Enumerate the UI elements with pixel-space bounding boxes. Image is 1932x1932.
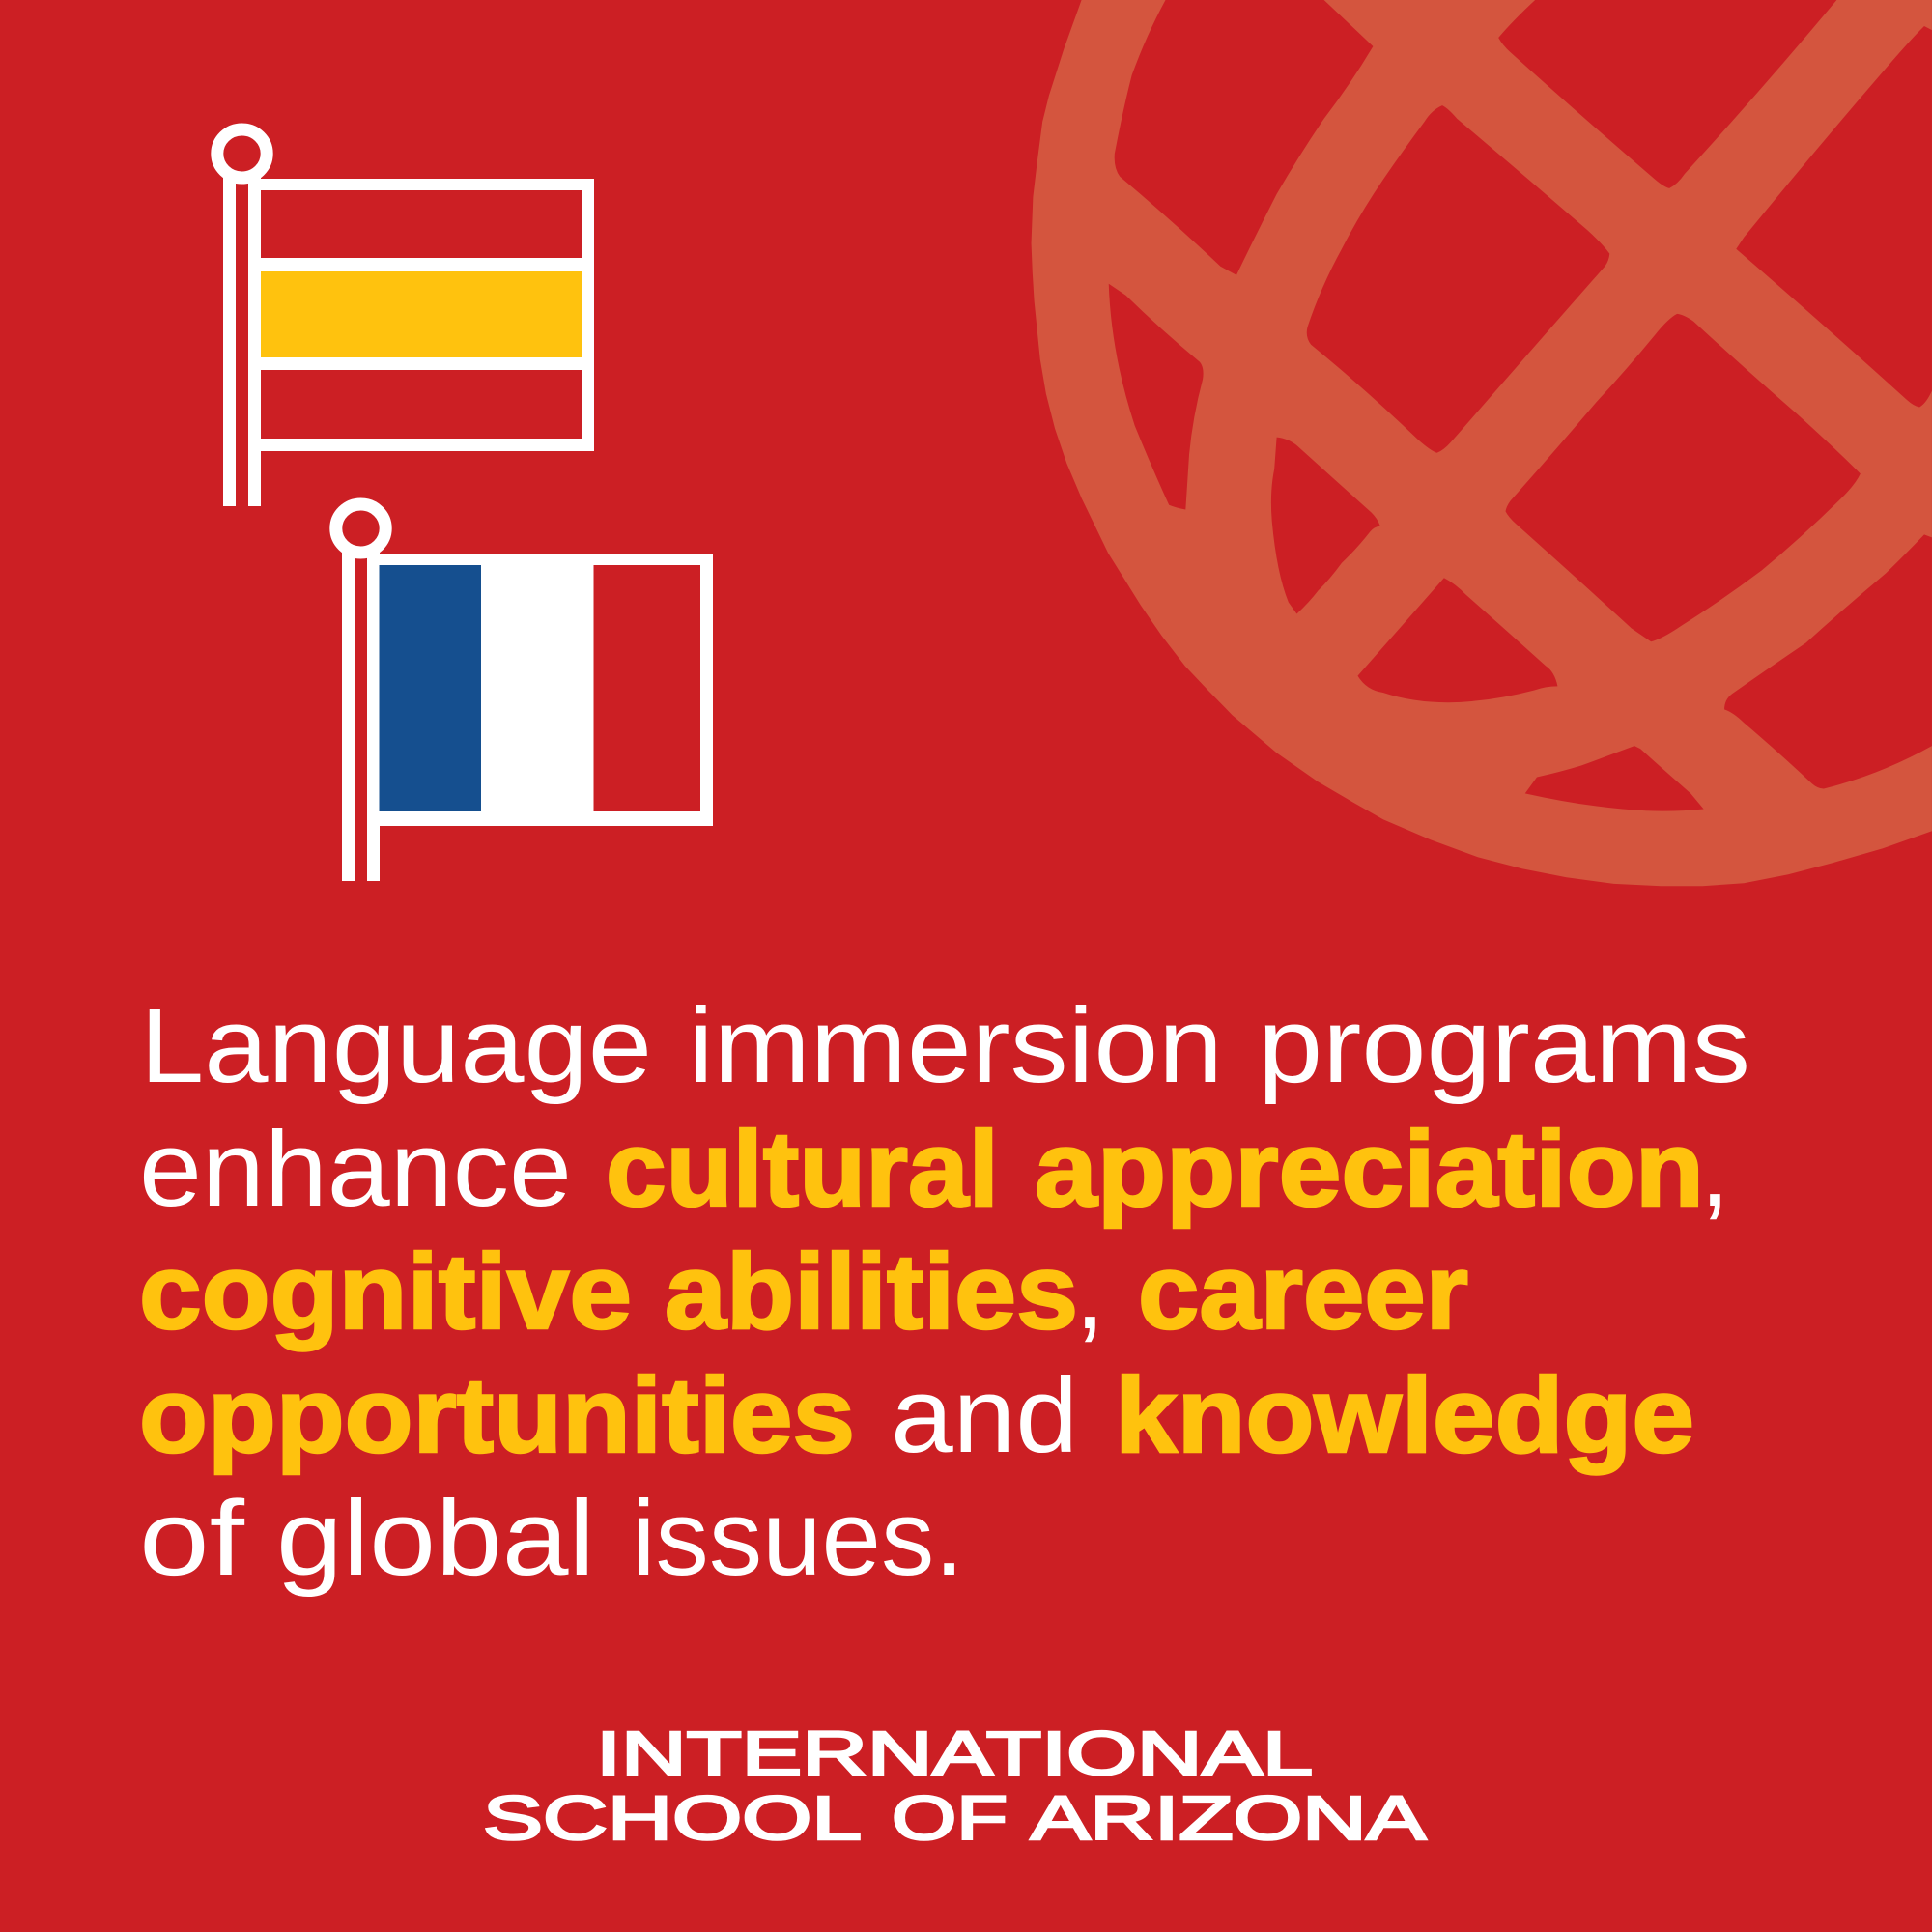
main statement text: Language (140, 986, 652, 1105)
school logotype: INTERNATIONAL (596, 1719, 1313, 1788)
main statement text: knowledge (1115, 1356, 1694, 1475)
icon: globe watermark (1032, 0, 1932, 886)
main statement text: enhance (139, 1110, 572, 1229)
main statement text: opportunities (139, 1356, 855, 1475)
main statement text: abilities (665, 1233, 1078, 1351)
school logotype: OF (892, 1783, 1008, 1853)
main statement text: immersion (688, 986, 1223, 1105)
icon: French flag (336, 504, 713, 881)
icon: Spanish flag (217, 129, 594, 506)
main statement text: career (1138, 1233, 1468, 1351)
main statement text: issues. (632, 1479, 964, 1598)
main statement text: programs (1258, 986, 1750, 1105)
school logotype: ARIZONA (1031, 1783, 1426, 1853)
main statement text: and (891, 1356, 1078, 1475)
main statement text: cultural (606, 1110, 999, 1229)
main statement text: appreciation (1035, 1110, 1704, 1229)
main statement text: , (1075, 1233, 1105, 1351)
main statement text: , (1700, 1110, 1730, 1229)
main statement text: global (276, 1479, 595, 1598)
school logotype: SCHOOL (483, 1783, 862, 1853)
main statement text (139, 986, 1750, 1598)
school logotype (483, 1719, 1426, 1853)
main statement text: of (139, 1479, 245, 1598)
main statement text: cognitive (139, 1233, 632, 1351)
